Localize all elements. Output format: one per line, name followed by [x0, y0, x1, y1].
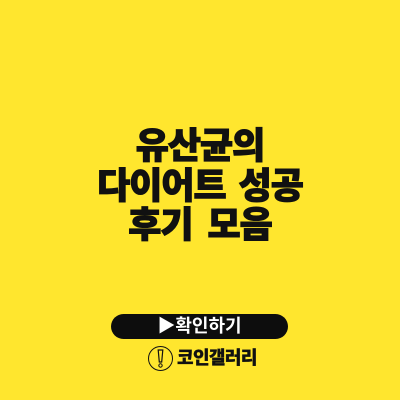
title: 유산균의	[136, 125, 264, 166]
button: confirm: ▶확인하기	[157, 316, 242, 336]
title	[97, 125, 304, 245]
brand name: 코인갤러리	[177, 348, 257, 368]
title: 후기 모음	[128, 204, 272, 245]
icon: exclamation circle	[148, 346, 173, 371]
title: 다이어트 성공	[97, 165, 303, 206]
button: confirm	[111, 314, 288, 339]
